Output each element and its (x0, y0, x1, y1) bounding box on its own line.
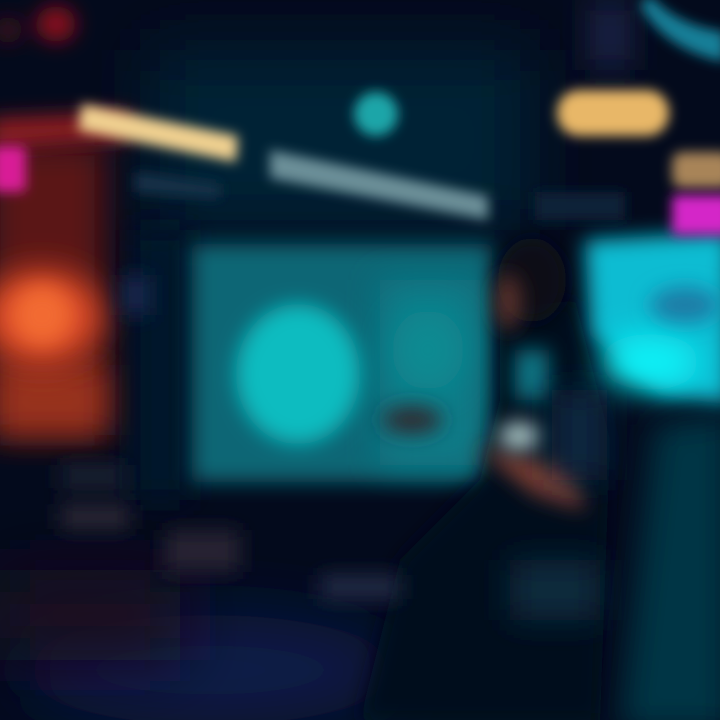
left red panel (0, 112, 130, 435)
teal dot lamp (354, 92, 398, 136)
warm light bar (78, 104, 238, 162)
right foreground teal column (620, 415, 720, 720)
red lamp top left (0, 6, 76, 44)
magenta sign left (0, 146, 26, 192)
person silhouette (360, 238, 610, 720)
hanging lamps and magenta sign right (557, 0, 720, 235)
blurred desk objects (60, 275, 400, 599)
cyan screen right (585, 232, 720, 405)
blurred sign text band (135, 150, 625, 220)
large teal screen (192, 244, 492, 482)
